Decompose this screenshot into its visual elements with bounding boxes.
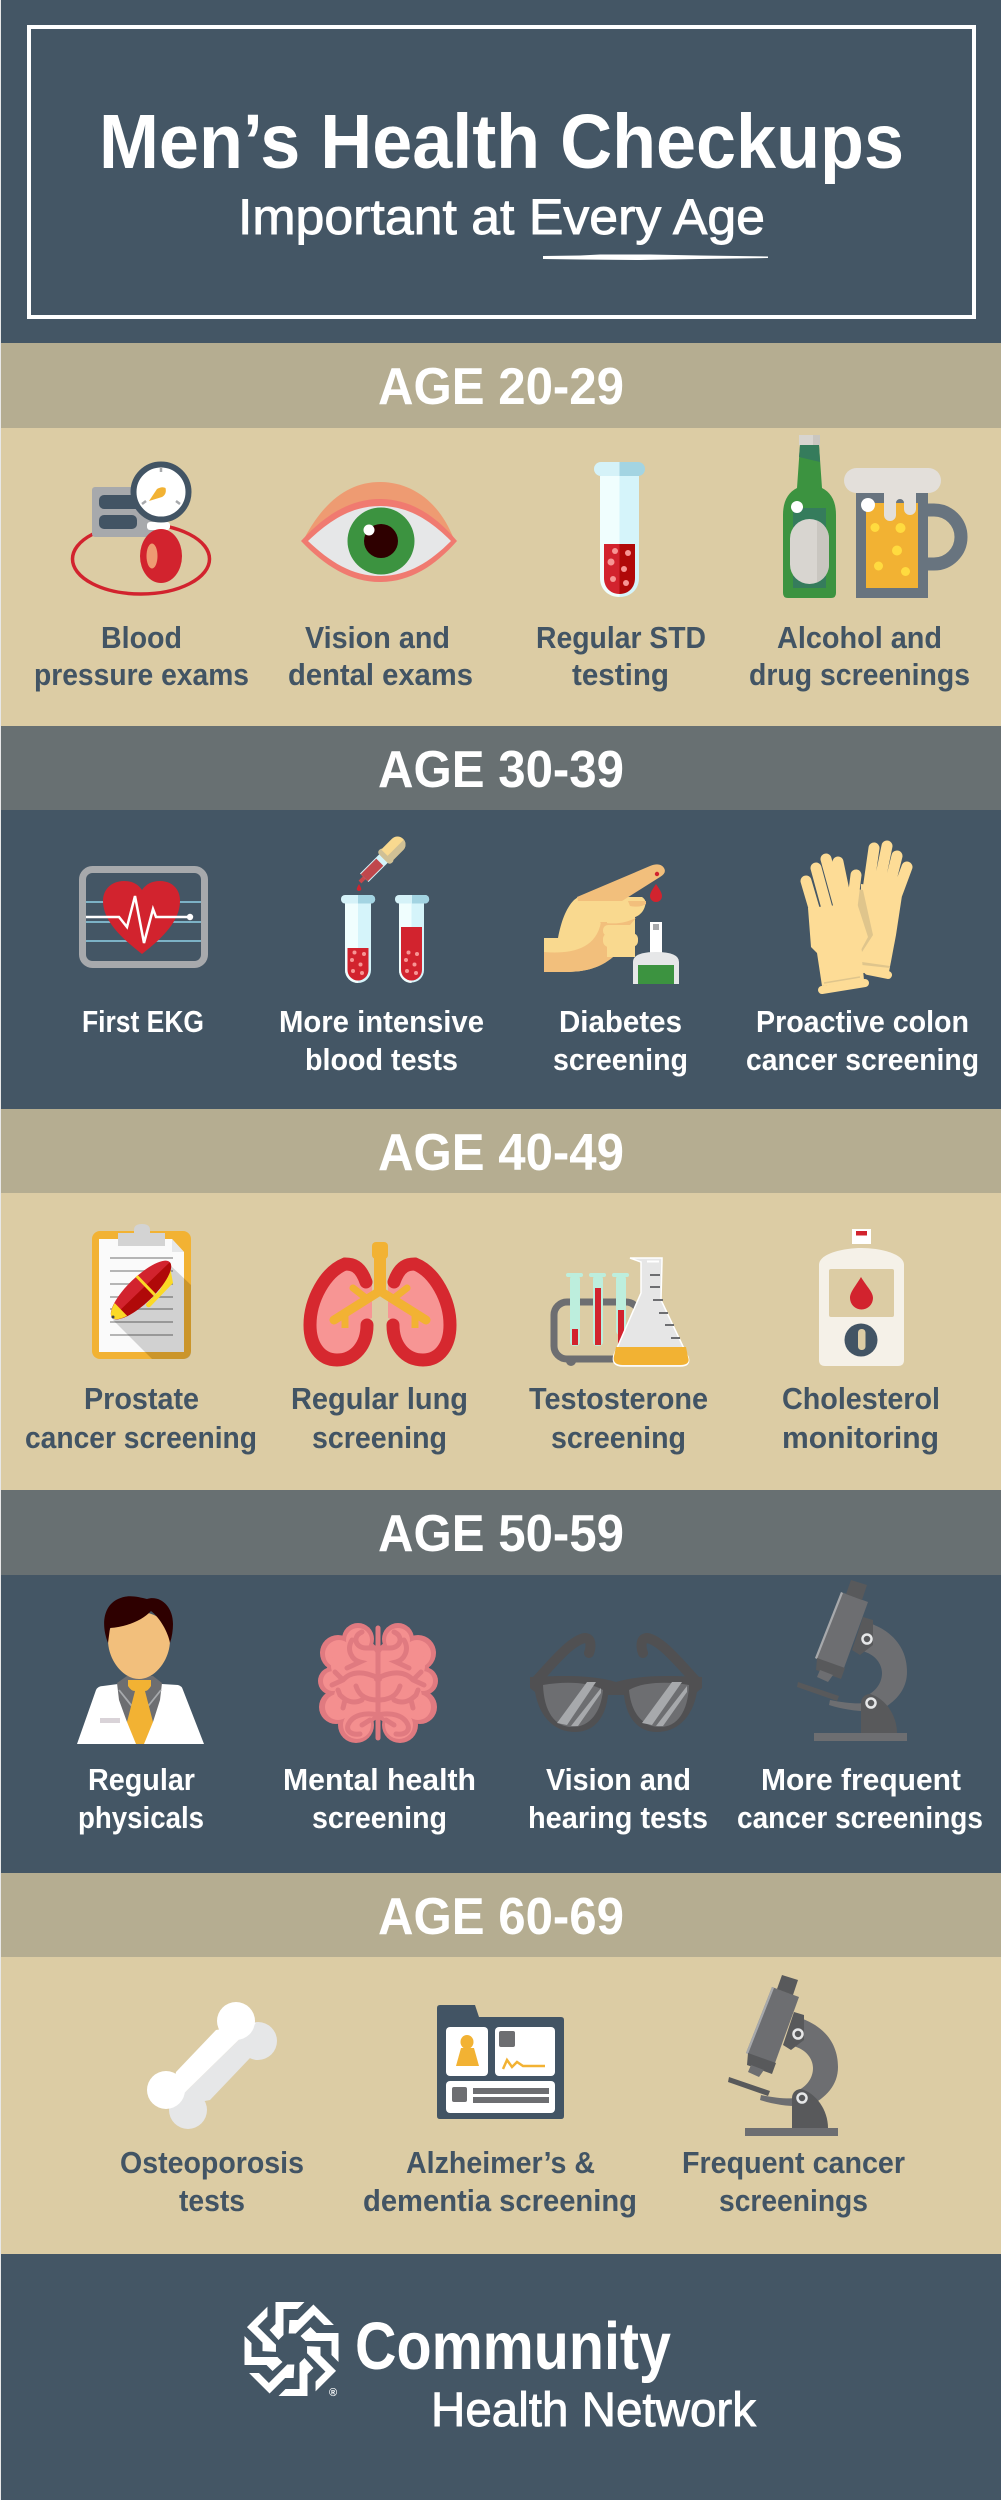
- label: regular physicals: physicals: [78, 1800, 204, 1835]
- label: osteoporosis tests: tests: [179, 2183, 245, 2218]
- title: Men’s Health Checkups: [99, 99, 904, 185]
- label: first EKG: First EKG: [82, 1004, 204, 1039]
- label: blood pressure exams: pressure exams: [34, 657, 249, 692]
- label: frequent cancer screenings: Frequent cancer: [682, 2145, 905, 2180]
- label: diabetes screening: Diabetes: [559, 1004, 682, 1039]
- label: vision and dental exams: dental exams: [288, 657, 473, 692]
- band: age 30-39: AGE 30-39: [378, 741, 624, 799]
- panel: age 20-29: [0, 428, 1001, 726]
- label: cholesterol monitoring: Cholesterol: [782, 1381, 940, 1416]
- label: frequent cancer screenings: [682, 2145, 905, 2218]
- icon: finger prick and glucose meter: [544, 864, 679, 984]
- registered mark: ®: [329, 2387, 337, 2399]
- label: alcohol and drug screenings: Alcohol and: [777, 620, 942, 655]
- band: age 50-59: [0, 1490, 1001, 1575]
- icon: beer bottle: [783, 435, 836, 598]
- icon: doctor: [77, 1596, 204, 1744]
- icon: glasses: [530, 1638, 702, 1732]
- label: alcohol and drug screenings: drug screenings: [749, 657, 970, 692]
- icon: brain: [318, 1623, 438, 1743]
- label: more intensive blood tests: blood tests: [305, 1042, 458, 1077]
- label: cholesterol monitoring: monitoring: [782, 1420, 939, 1455]
- label: regular STD testing: Regular STD: [536, 620, 706, 655]
- label: testosterone screening: screening: [551, 1420, 686, 1455]
- label: frequent cancer screenings: screenings: [719, 2183, 868, 2218]
- logo mark: [243, 2300, 340, 2398]
- label: mental health screening: screening: [312, 1800, 447, 1835]
- label: Alzheimer's and dementia screening: Alzheimer’s &: [406, 2145, 595, 2180]
- label: diabetes screening: [553, 1004, 688, 1077]
- panel: age 60-69: [0, 1957, 1001, 2254]
- label: regular STD testing: [536, 620, 706, 692]
- band: age 20-29: AGE 20-29: [378, 358, 624, 416]
- icon: gloves: [806, 846, 907, 990]
- icon: rack and flask: [554, 1258, 689, 1366]
- band: age 20-29: [0, 343, 1001, 428]
- icon: beer mug: [844, 468, 961, 598]
- label: prostate cancer screening: [25, 1381, 257, 1455]
- icon: dropper and blood tubes: [341, 833, 429, 983]
- label: cholesterol monitoring: [782, 1381, 940, 1455]
- label: vision and hearing tests: hearing tests: [528, 1800, 708, 1835]
- label: blood pressure exams: [34, 620, 249, 692]
- label: regular lung screening: [291, 1381, 468, 1455]
- label: proactive colon cancer screening: cancer screening: [746, 1042, 979, 1077]
- band: age 60-69: [0, 1873, 1001, 1957]
- panel: age 50-59: [0, 1575, 1001, 1873]
- label: vision and hearing tests: [528, 1762, 708, 1835]
- label: vision and dental exams: [288, 620, 473, 692]
- icon: medical folder: [437, 2005, 564, 2119]
- logo wordmark: Health Network: [431, 2384, 757, 2437]
- label: testosterone screening: [529, 1381, 708, 1455]
- label: more intensive blood tests: More intensive: [279, 1004, 484, 1039]
- label: proactive colon cancer screening: [746, 1004, 979, 1077]
- label: prostate cancer screening: Prostate: [84, 1381, 199, 1416]
- icon: microscope: [797, 1580, 907, 1741]
- header panel: [0, 0, 1001, 343]
- icon: bone: [147, 2002, 277, 2129]
- panel: age 30-39: [0, 810, 1001, 1109]
- icon: cholesterol meter: [819, 1229, 904, 1366]
- label: diabetes screening: screening: [553, 1042, 688, 1077]
- logo wordmark: [355, 2309, 757, 2437]
- label: blood pressure exams: Blood: [101, 620, 182, 655]
- icon: microscope: [728, 1975, 838, 2136]
- label: osteoporosis tests: Osteoporosis: [120, 2145, 304, 2180]
- label: regular physicals: [78, 1762, 204, 1835]
- label: vision and dental exams: Vision and: [305, 620, 450, 655]
- label: osteoporosis tests: [120, 2145, 304, 2218]
- label: regular lung screening: Regular lung: [291, 1381, 468, 1416]
- band: age 40-49: AGE 40-49: [378, 1124, 624, 1182]
- label: Alzheimer's and dementia screening: [363, 2145, 637, 2218]
- band: age 60-69: AGE 60-69: [378, 1888, 624, 1946]
- band: age 30-39: [0, 726, 1001, 810]
- icon: blood pressure gauge: [72, 464, 210, 594]
- label: proactive colon cancer screening: Proactive colon: [756, 1004, 969, 1039]
- logo wordmark: Community: [355, 2309, 671, 2384]
- label: prostate cancer screening: cancer screening: [25, 1420, 257, 1455]
- label: regular STD testing: testing: [572, 657, 669, 692]
- footer panel: [0, 2254, 1001, 2500]
- icon: clipboard and pen: [92, 1224, 191, 1359]
- label: testosterone screening: Testosterone: [529, 1381, 708, 1416]
- panel: age 40-49: [0, 1193, 1001, 1490]
- icon: lungs: [310, 1242, 450, 1360]
- band: age 50-59: AGE 50-59: [378, 1505, 624, 1563]
- label: mental health screening: Mental health: [283, 1762, 476, 1797]
- band: age 40-49: [0, 1109, 1001, 1193]
- icon: test tube: [594, 462, 645, 597]
- icon: EKG monitor: [82, 870, 204, 964]
- label: regular physicals: Regular: [88, 1762, 195, 1797]
- label: regular lung screening: screening: [312, 1420, 447, 1455]
- label: more frequent cancer screenings: More frequent: [761, 1762, 961, 1797]
- label: vision and hearing tests: Vision and: [546, 1762, 691, 1797]
- label: Alzheimer's and dementia screening: dementia screening: [363, 2183, 637, 2218]
- label: alcohol and drug screenings: [749, 620, 970, 692]
- label: mental health screening: [283, 1762, 476, 1835]
- subtitle: Important at Every Age: [238, 189, 765, 245]
- icon: eye: [301, 482, 457, 582]
- label: more intensive blood tests: [279, 1004, 484, 1077]
- label: more frequent cancer screenings: [737, 1762, 983, 1835]
